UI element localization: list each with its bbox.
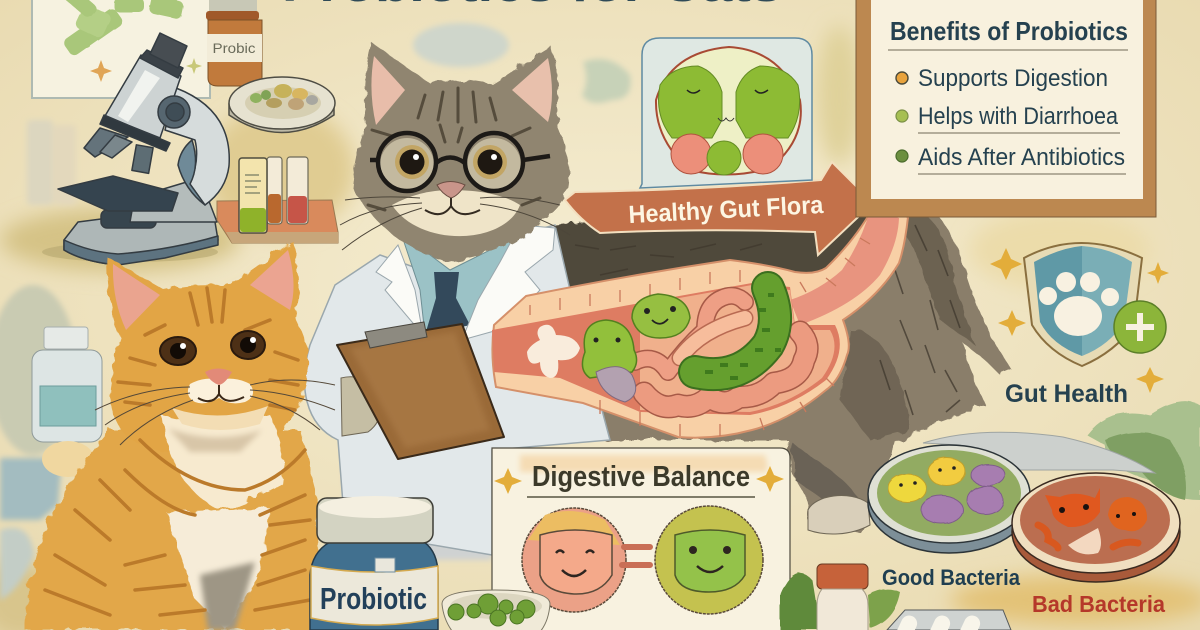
good bacteria petri dish (868, 445, 1030, 553)
panel: digestive balance (492, 448, 790, 630)
grey lab cat (305, 43, 1012, 555)
icon: green bacteria (655, 506, 763, 614)
friendly bacteria (582, 294, 690, 378)
label: bad bacteria: Bad Bacteria (1032, 591, 1165, 617)
icon: pink bacteria (522, 508, 626, 612)
bowl: green capsules (442, 590, 550, 630)
coat lapels (376, 225, 555, 340)
supplement bottle (817, 564, 868, 630)
blister pack (887, 610, 1011, 630)
poster: top left (32, 0, 210, 98)
cat hand (341, 377, 381, 436)
left supplement bottle (32, 327, 102, 442)
glasses (370, 133, 550, 191)
shirt and tie (401, 233, 520, 335)
lab coat back layer (345, 430, 492, 560)
benefits heading: Benefits of Probiotics (890, 16, 1128, 46)
jar: probiotic top shelf (206, 0, 262, 86)
label: good bacteria: Good Bacteria (882, 565, 1021, 590)
benefit: digestion: Supports Digestion (918, 65, 1108, 92)
panel: benefits of probiotics (856, 0, 1156, 217)
jar label: Probiotic (320, 581, 427, 616)
herbs (780, 573, 900, 630)
icon: white cross (527, 325, 580, 378)
arrow: healthy gut flora (565, 162, 873, 255)
test tubes (217, 157, 338, 243)
icon: gut health shield (990, 243, 1169, 393)
metal tray behind dishes (923, 432, 1155, 473)
bad bacteria petri dish (1012, 473, 1180, 582)
petri dish: capsules (229, 77, 335, 132)
label: gut health: Gut Health (1005, 380, 1128, 408)
icon: balance connector (622, 547, 650, 565)
jar: probiotic top shelf: Probic (212, 40, 256, 56)
cat paw (808, 496, 870, 534)
cat head (352, 43, 569, 262)
cat body (500, 190, 1012, 532)
probiotic jar (310, 496, 438, 630)
badge: gut flora bacteria (640, 38, 812, 188)
intestine coils (635, 296, 807, 407)
arrow label: Healthy Gut Flora (628, 191, 825, 229)
benefit: antibiotics: Aids After Antibiotics (918, 144, 1125, 171)
lab coat (305, 225, 610, 555)
intestine diagram (492, 208, 908, 438)
tabby cat (25, 241, 335, 630)
microscope (42, 33, 229, 265)
panel heading: Digestive Balance (532, 461, 750, 493)
cream pill (42, 441, 94, 477)
green colon (695, 288, 781, 378)
clipboard (337, 322, 504, 459)
benefit: diarrhoea: Helps with Diarrhoea (918, 103, 1119, 130)
foliage behind dishes (1087, 402, 1200, 500)
